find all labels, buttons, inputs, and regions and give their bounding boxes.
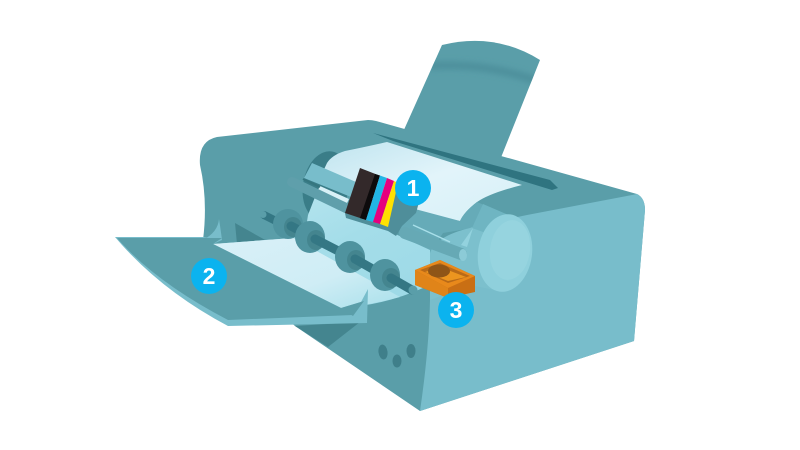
ink cartridges bbox=[345, 168, 398, 227]
feed rollers bbox=[260, 209, 418, 294]
paper middle bbox=[213, 197, 430, 308]
roller 4 bbox=[370, 259, 412, 291]
output tray bbox=[115, 237, 368, 326]
printer body bbox=[200, 120, 645, 411]
badge 3: 3 bbox=[450, 297, 462, 323]
print head rail bbox=[292, 163, 473, 261]
badge 3 bbox=[438, 292, 474, 328]
paper output sheet bbox=[213, 238, 400, 308]
paper support bbox=[403, 41, 540, 160]
side light face bbox=[420, 194, 645, 411]
roller 3 bbox=[335, 241, 385, 276]
roller 2 bbox=[295, 221, 350, 257]
carriage bbox=[345, 183, 421, 236]
badge 1: 1 bbox=[407, 175, 420, 201]
left wall notch bbox=[203, 219, 222, 240]
printer illustration bbox=[115, 40, 645, 411]
badge 1 bbox=[395, 170, 431, 206]
shaft start bbox=[264, 215, 290, 228]
ink absorber bbox=[415, 260, 475, 298]
badge 2 bbox=[191, 258, 227, 294]
paper in feed bbox=[320, 142, 522, 221]
button holes bbox=[378, 344, 416, 368]
region behind roller bbox=[400, 202, 513, 253]
roller cavity bbox=[297, 148, 355, 224]
roller housing bbox=[430, 204, 537, 300]
roller 1 bbox=[273, 209, 312, 239]
shadow under tray bbox=[295, 322, 360, 347]
badge 2: 2 bbox=[203, 263, 215, 289]
paper slot bbox=[373, 133, 558, 190]
